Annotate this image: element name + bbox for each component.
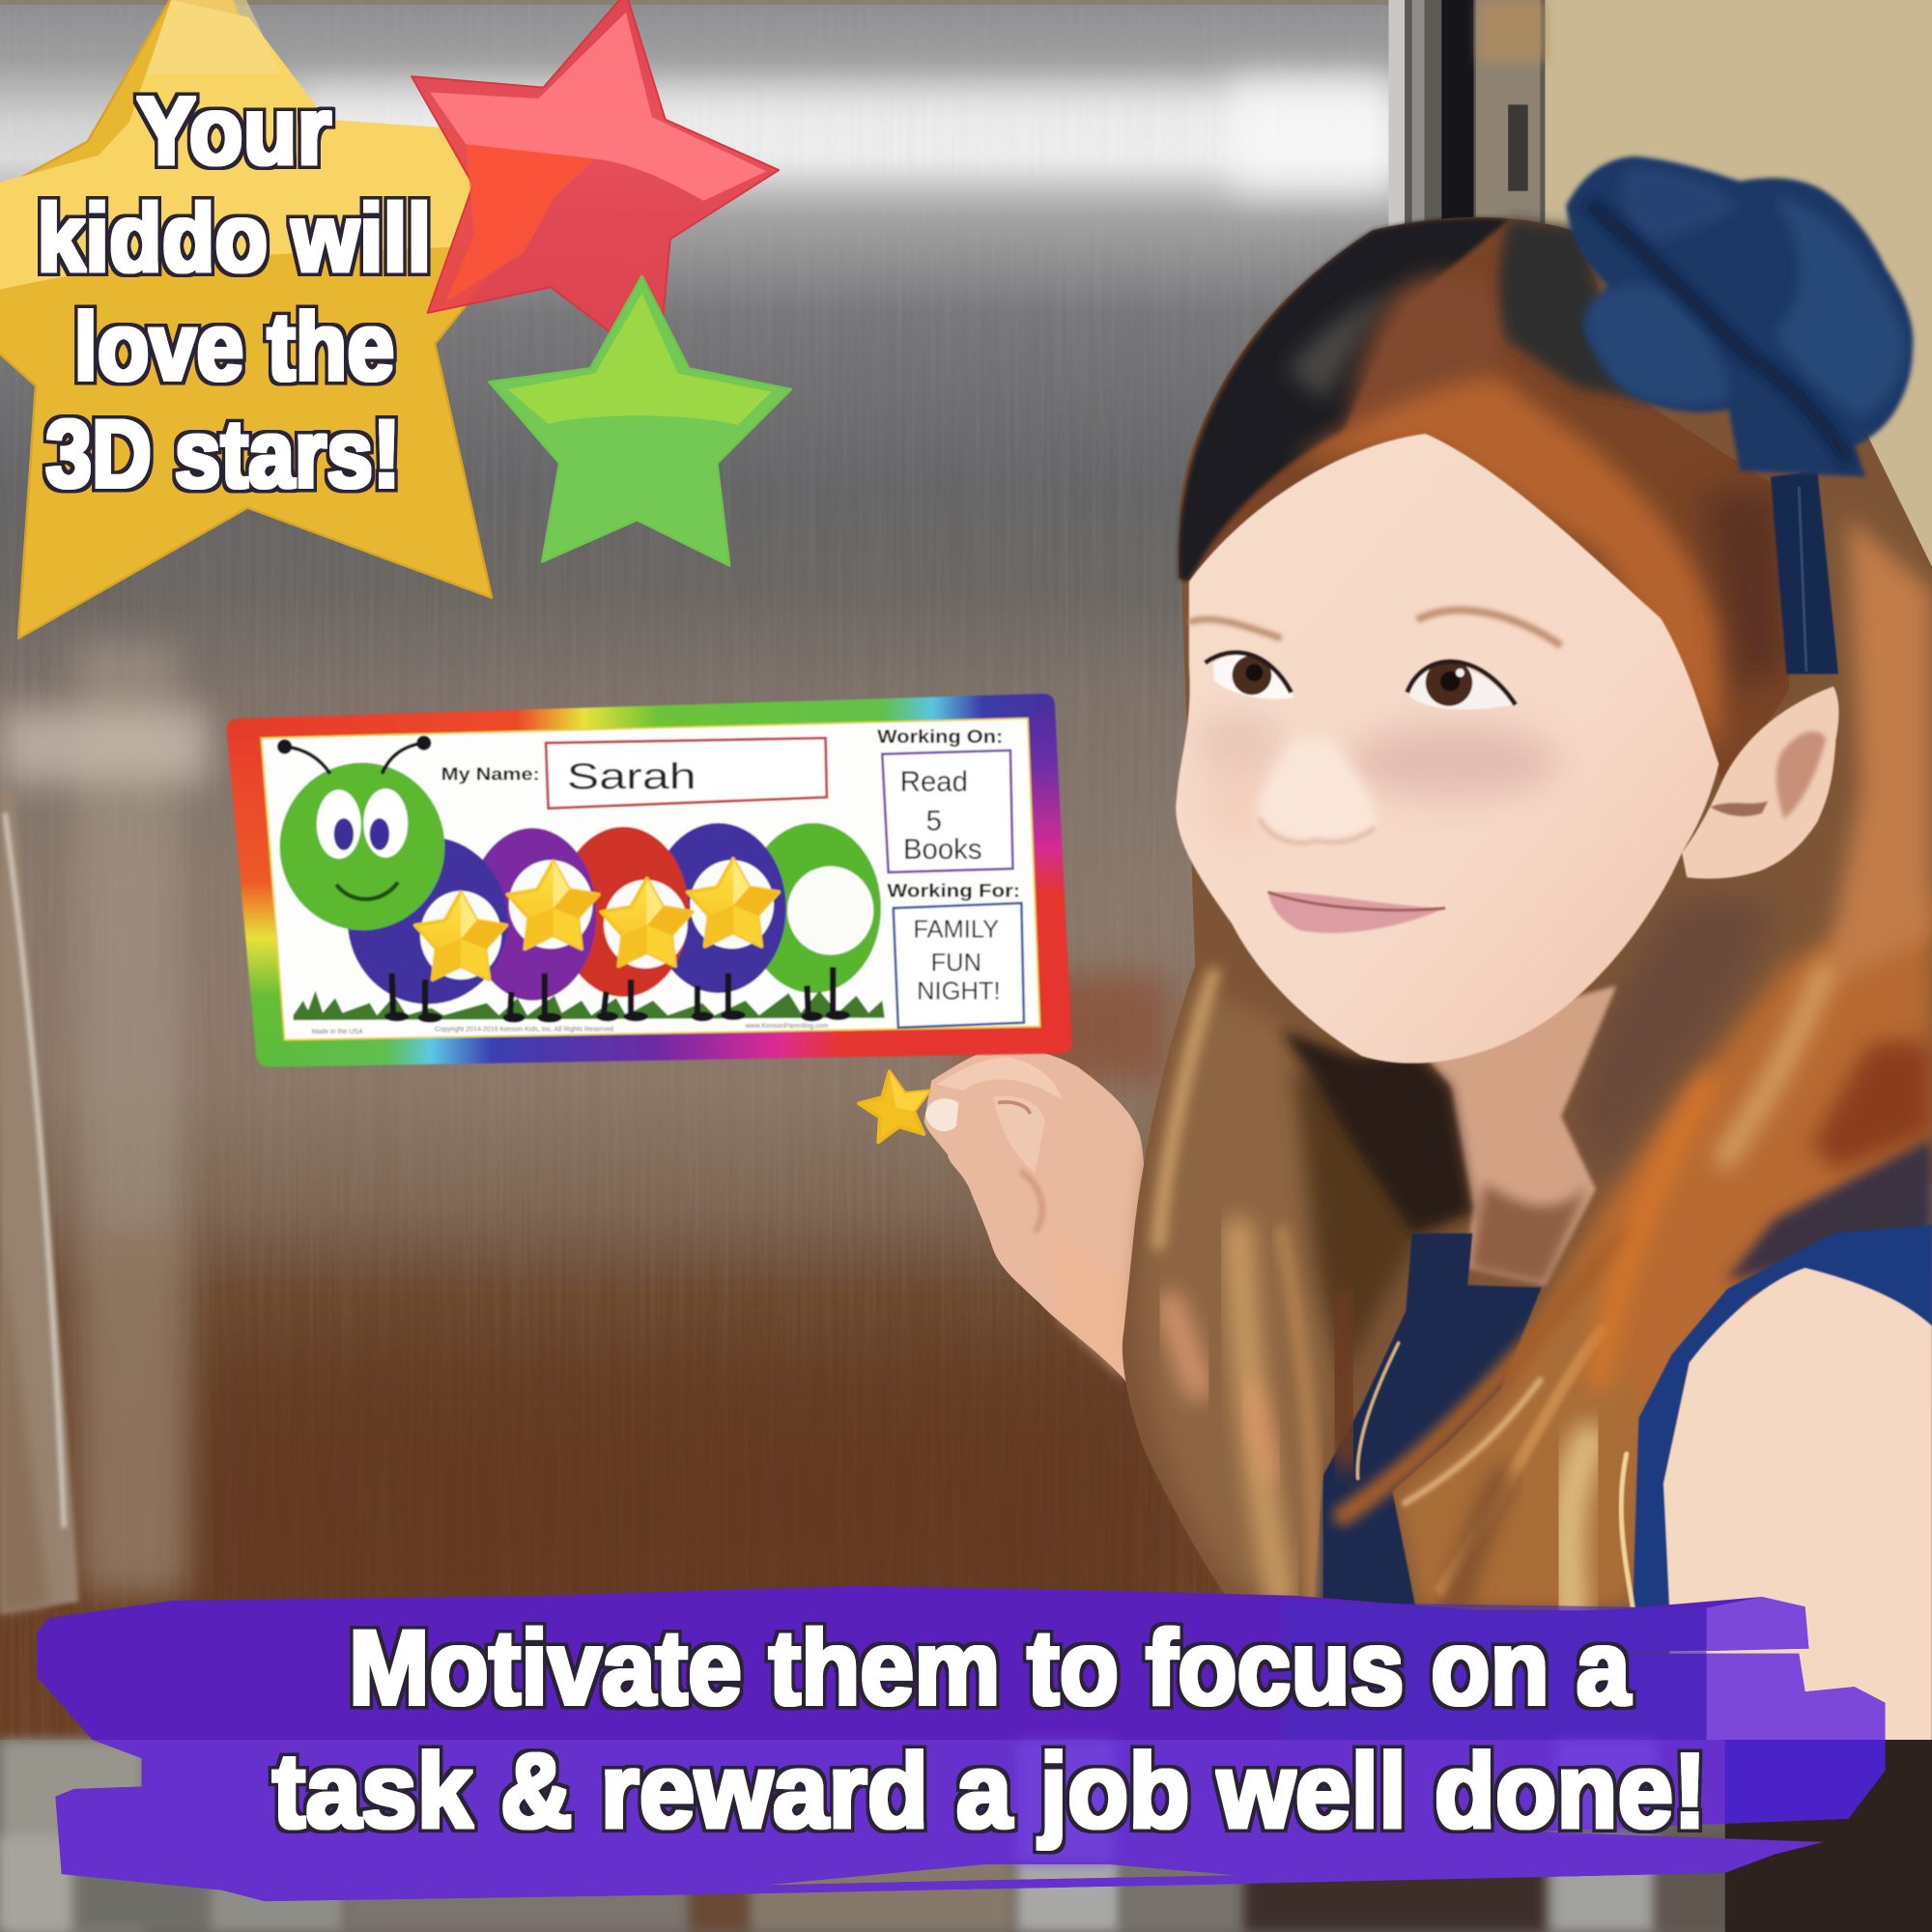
large yellow star bbox=[0, 0, 600, 639]
mouth bbox=[1267, 892, 1445, 933]
working on box: Books bbox=[903, 834, 982, 866]
neck bbox=[1417, 985, 1616, 1285]
face bbox=[1176, 434, 1839, 1064]
name field: My Name: bbox=[441, 763, 540, 783]
hair flower bbox=[1566, 156, 1913, 477]
grass bbox=[294, 991, 885, 1020]
green star bbox=[489, 276, 791, 565]
magnetic reward chart card bbox=[227, 694, 1072, 1067]
ear bbox=[1682, 686, 1839, 879]
card footer: Made in the USA bbox=[312, 1029, 363, 1036]
red star bbox=[412, 0, 779, 368]
legs bbox=[392, 967, 833, 1015]
girl hair back bbox=[1122, 217, 1932, 1614]
hair strands bbox=[1158, 974, 1824, 1614]
brows bbox=[1189, 619, 1282, 639]
star caption: love the bbox=[74, 294, 394, 401]
working on box: Working On: bbox=[877, 726, 1003, 748]
purple banner bbox=[37, 1586, 1886, 1901]
arm and hand bbox=[924, 1047, 1233, 1540]
white card area bbox=[261, 719, 1040, 1040]
shoulder bbox=[1663, 1267, 1932, 1749]
working on box: 5 bbox=[926, 806, 942, 838]
working on box: Read bbox=[900, 766, 968, 798]
door edge and wall bbox=[1389, 0, 1932, 640]
eyes bbox=[1205, 652, 1516, 710]
star caption bbox=[37, 78, 431, 508]
star caption: Your bbox=[137, 78, 331, 185]
caterpillar head bbox=[277, 735, 444, 930]
star caption: kiddo will bbox=[37, 185, 431, 293]
dress strap bbox=[1633, 1225, 1932, 1614]
name field: Sarah bbox=[567, 755, 696, 797]
banner headline bbox=[272, 1609, 1707, 1851]
nose bbox=[1259, 739, 1376, 840]
card footer: Copyright 2014-2016 Kenson Kids, Inc. All Rights Reserved bbox=[435, 1027, 613, 1034]
card footer: www.KensonParenting.com bbox=[745, 1023, 828, 1030]
yellow 3D star in hand bbox=[854, 1065, 936, 1144]
working for box: FUN bbox=[931, 950, 981, 977]
lower hair colour patches bbox=[1140, 518, 1932, 1602]
working for box: NIGHT! bbox=[917, 978, 1001, 1005]
name field bbox=[441, 738, 827, 809]
banner headline: task & reward a job well done! bbox=[272, 1733, 1707, 1851]
bottom photo strip bbox=[0, 1740, 1932, 1932]
caterpillar body bbox=[294, 823, 885, 1023]
dress bbox=[1312, 1139, 1932, 1614]
card footer bbox=[312, 1023, 828, 1036]
hair top bbox=[1179, 217, 1789, 788]
working for box bbox=[887, 881, 1024, 1028]
working for box: FAMILY bbox=[913, 917, 999, 944]
headband bbox=[1771, 470, 1838, 674]
rainbow border bbox=[227, 694, 1072, 1067]
working for box: Working For: bbox=[887, 881, 1020, 902]
working on box bbox=[877, 726, 1012, 872]
cheek shading bbox=[1348, 724, 1560, 799]
dark hair under chin bbox=[1282, 1030, 1472, 1233]
neck shadow bbox=[1468, 1182, 1589, 1285]
banner headline: Motivate them to focus on a bbox=[349, 1609, 1631, 1727]
star caption: 3D stars! bbox=[45, 401, 401, 508]
